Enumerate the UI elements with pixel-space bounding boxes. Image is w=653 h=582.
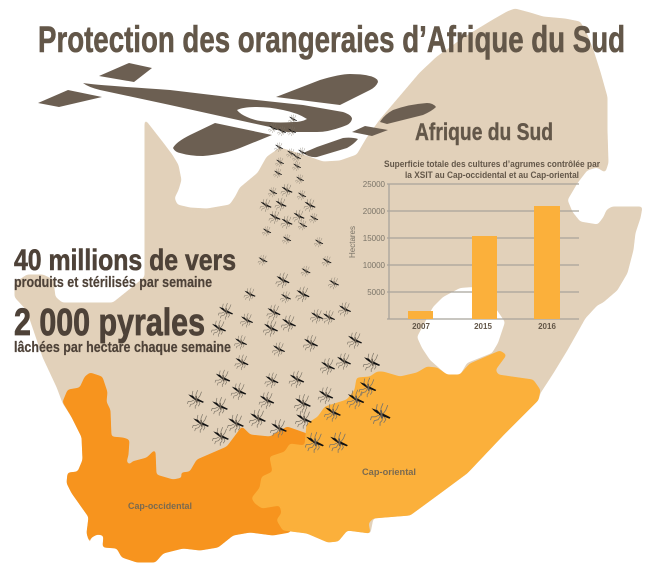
bars [408, 206, 560, 319]
x axis labels: 2007 [412, 322, 430, 331]
stat: 40 millions de vers: 40 millions de vers [14, 244, 236, 277]
chart title [384, 159, 600, 180]
right wing piece [303, 138, 358, 157]
y axis title: Hectares [348, 226, 357, 258]
y axis labels: 5000 [367, 288, 386, 297]
bar chart [348, 159, 600, 331]
engine diamond [352, 126, 388, 136]
x axis labels: 2016 [538, 322, 556, 331]
region: Cap-occidental [63, 373, 310, 562]
mosquito swarm [187, 115, 390, 453]
stat: 40 millions de vers: produits et stérilisés par semaine [14, 275, 212, 291]
x axis labels: 2015 [474, 322, 492, 331]
tail fin upper [99, 63, 152, 82]
airplane [38, 63, 436, 157]
lower wing [173, 123, 272, 156]
inland white hole [417, 287, 505, 375]
region: Cap-oriental [252, 351, 540, 542]
upper wing [276, 74, 378, 105]
chart title: la XSIT au Cap-occidental et au Cap-oriental [405, 170, 579, 180]
chart title: Superficie totale des cultures d’agrumes contrôlée par [384, 159, 600, 169]
map heading: Afrique du Sud [415, 119, 553, 146]
y axis labels [363, 180, 386, 297]
x axis labels [412, 322, 556, 331]
label: Cap-occidental: Cap-occidental [128, 501, 192, 511]
stat: 2 000 pyrales: lâchées par hectare chaque semaine [14, 340, 231, 356]
fuselage [83, 83, 352, 132]
grid and axes [387, 184, 579, 319]
stat: 40 millions de vers [14, 244, 236, 291]
y axis labels: 10000 [363, 261, 386, 270]
tail fin lower [38, 90, 102, 107]
y axis labels: 20000 [363, 207, 386, 216]
y axis labels: 15000 [363, 234, 386, 243]
label: Cap-oriental: Cap-oriental [362, 467, 416, 477]
y axis labels: 25000 [363, 180, 386, 189]
far wing tip [380, 103, 436, 124]
stat: 2 000 pyrales: 2 000 pyrales [14, 302, 205, 344]
